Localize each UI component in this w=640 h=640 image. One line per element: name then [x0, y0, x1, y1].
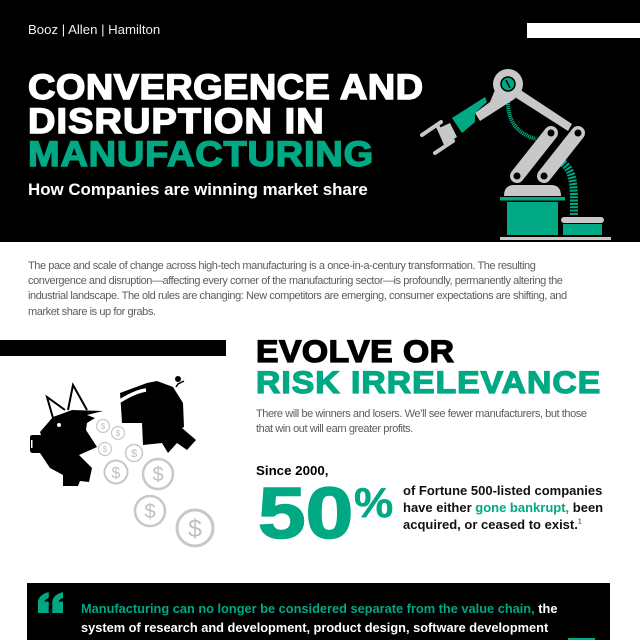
subtitle: How Companies are winning market share	[28, 180, 368, 199]
quote text	[81, 600, 560, 640]
icon: opening quote mark	[38, 592, 63, 613]
intro paragraph: convergence and disruption—affecting every corner of the manufacturing sector—is profoundly, permanently altering the	[28, 275, 562, 287]
since 2000 label: Since 2000,	[256, 463, 328, 478]
white header bar	[527, 23, 640, 38]
base	[504, 185, 561, 196]
statistic description: acquired, or ceased to exist.1	[403, 517, 582, 532]
icon: broken piggy bank with coins: $	[188, 515, 202, 543]
title: CONVERGENCE AND	[28, 67, 423, 107]
right half	[120, 381, 196, 453]
icon: broken piggy bank with coins: $	[152, 464, 164, 486]
icon: broken piggy bank with coins: $	[103, 445, 108, 454]
statistic description: have either gone bankrupt, been	[403, 500, 603, 515]
coins	[96, 420, 213, 546]
icon: broken piggy bank with coins: $	[144, 501, 156, 523]
icon: broken piggy bank with coins: $	[101, 422, 106, 431]
hoses	[508, 102, 536, 139]
forearm	[475, 90, 516, 121]
quote text: system of research and development, product design, software development	[81, 620, 548, 634]
section heading: EVOLVE OR	[256, 333, 454, 369]
title: MANUFACTURING	[28, 134, 374, 174]
logo wordmark: Booz | Allen | Hamilton	[28, 22, 160, 37]
statistic: 50 percent: %	[354, 479, 393, 526]
gripper	[437, 123, 457, 145]
section paragraph: that win out will earn greater profits.	[256, 423, 413, 435]
icon: robot arm	[420, 69, 611, 240]
statistic: 50 percent: 50	[258, 474, 353, 554]
title	[28, 67, 423, 174]
section heading: RISK IRRELEVANCE	[256, 364, 601, 400]
statistic description	[403, 483, 603, 532]
links	[517, 133, 551, 176]
icon: broken piggy bank with coins: $	[112, 465, 121, 482]
intro paragraph: The pace and scale of change across high-tech manufacturing is a once-in-a-century transformation. The resulting	[28, 260, 535, 272]
section paragraph	[256, 408, 587, 435]
intro paragraph: industrial landscape. The old rules are changing: New competitors are emerging, consumer expectations are shifting, and	[28, 290, 567, 302]
header panel	[0, 0, 640, 242]
black section bar	[0, 340, 226, 356]
intro paragraph	[28, 260, 567, 318]
section heading	[256, 333, 601, 400]
upper arm	[510, 87, 572, 131]
teal gripper housing	[452, 97, 487, 133]
quote text: Manufacturing can no longer be considered separate from the value chain, the	[81, 600, 557, 616]
quote panel	[27, 583, 610, 640]
title: DISRUPTION IN	[28, 100, 325, 140]
icon: broken piggy bank with coins: $	[131, 448, 137, 460]
section paragraph: There will be winners and losers. We’ll see fewer manufacturers, but those	[256, 408, 587, 420]
icon: broken piggy bank with coins: $	[116, 429, 121, 438]
statistic description: of Fortune 500-listed companies	[403, 483, 602, 498]
icon: broken piggy bank with coins	[30, 376, 214, 548]
intro paragraph: market share is up for grabs.	[28, 306, 156, 318]
pivot	[493, 69, 523, 99]
left half	[30, 410, 103, 486]
icon: closing quote mark	[568, 638, 595, 640]
